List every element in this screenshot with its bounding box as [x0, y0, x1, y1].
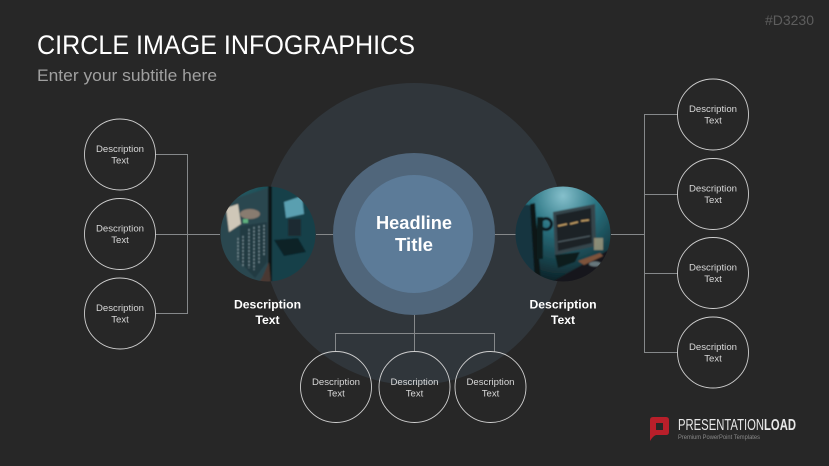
headline: Headline — [376, 213, 452, 233]
label: right photo description — [529, 298, 597, 327]
logo tagline: Premium PowerPoint Templates — [678, 435, 760, 441]
label: left photo description — [234, 298, 301, 327]
middle circle — [333, 153, 495, 315]
left node 3: Text — [111, 314, 129, 326]
subtitle: Enter your subtitle here — [37, 66, 217, 85]
right node 2 — [678, 158, 748, 230]
label: right photo description: Description — [529, 298, 597, 312]
bottom node 2: Description — [390, 377, 438, 388]
bottom node 1: Text — [327, 388, 345, 400]
bottom node 1: Description — [312, 377, 360, 388]
right node 2: Description — [689, 184, 737, 194]
right node 3: Description — [689, 262, 737, 274]
left node 1: Description — [96, 144, 144, 155]
right node 4: Description — [689, 342, 737, 353]
left node 2 — [84, 198, 156, 270]
right node 3: Text — [704, 274, 722, 285]
bottom node 2 — [379, 352, 450, 422]
right node 1: Text — [704, 116, 722, 126]
label: right photo description: Text — [551, 313, 575, 327]
left node 2: Text — [111, 235, 129, 246]
inner circle with headline: Title — [395, 235, 433, 255]
inner circle with headline — [355, 175, 473, 293]
bottom node 3: Description — [466, 377, 514, 388]
right node 4 — [678, 317, 748, 388]
label: left photo description: Text — [255, 313, 280, 327]
template code: #D3230 — [765, 12, 814, 28]
label: left photo description: Description — [234, 298, 301, 312]
left node 3: Description — [96, 303, 144, 314]
right node 3 — [678, 238, 748, 308]
large background circle — [263, 83, 565, 385]
right node 2: Text — [704, 195, 722, 206]
bottom node 2: Text — [406, 388, 424, 400]
bottom node 3 — [455, 352, 526, 422]
left node 2: Description — [96, 224, 144, 234]
connector lines — [155, 114, 678, 352]
right node 1: Description — [689, 104, 737, 115]
right node 4: Text — [704, 354, 722, 364]
left node 3 — [84, 278, 156, 349]
left node 1: Text — [111, 156, 129, 166]
logo — [650, 417, 796, 441]
right photo circle: desktop workstation — [514, 184, 612, 284]
bottom node 1 — [300, 352, 372, 422]
icon: logo mark — [650, 417, 669, 441]
left node 1 — [84, 119, 156, 190]
title: CIRCLE IMAGE INFOGRAPHICS — [37, 30, 415, 60]
bottom node 3: Text — [482, 388, 500, 400]
left photo circle: monitor with code — [218, 184, 318, 284]
right node 1 — [678, 79, 748, 150]
logo wordmark: PRESENTATIONLOAD — [678, 417, 796, 434]
